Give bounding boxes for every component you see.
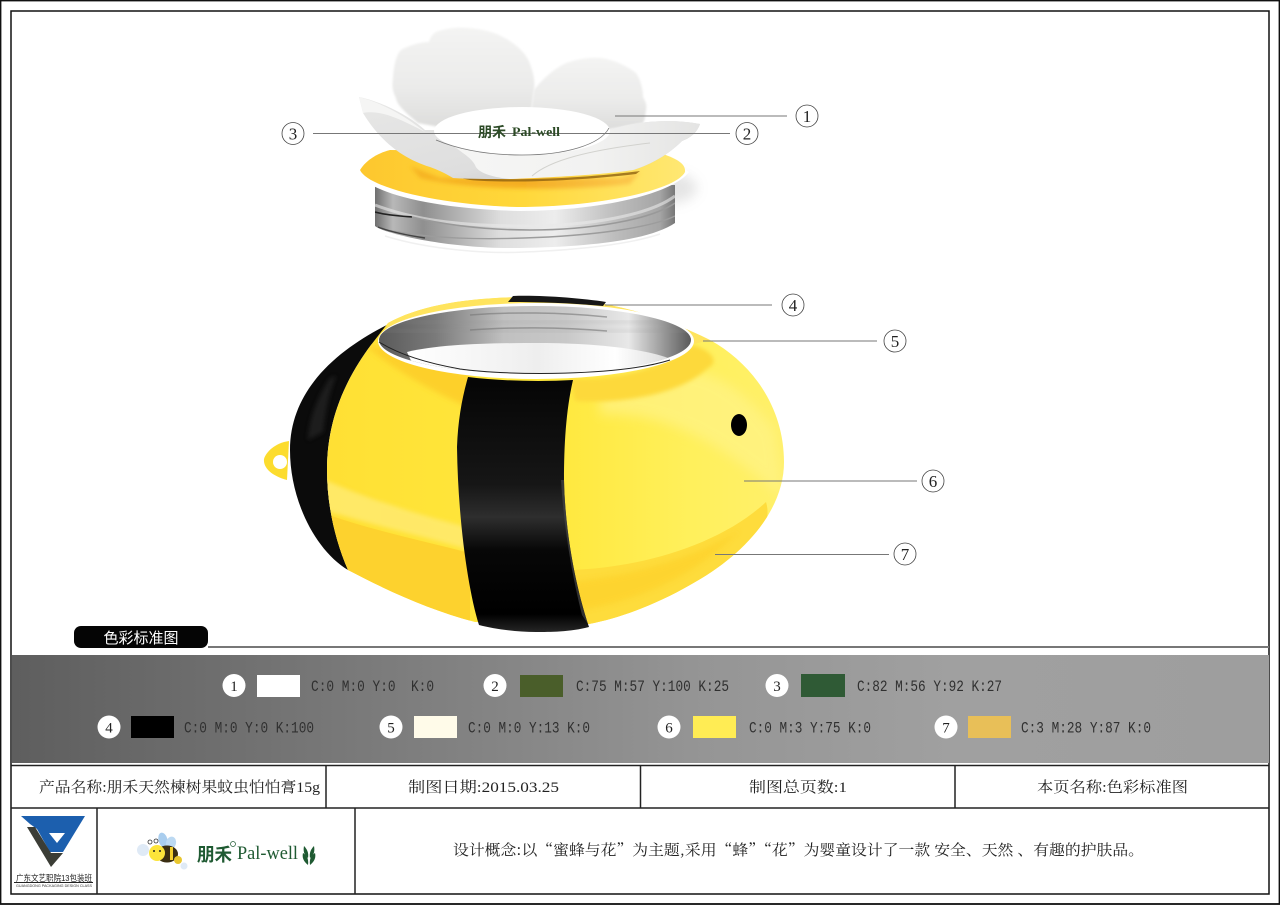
colour 1 bbox=[222, 674, 434, 697]
colour 6 bbox=[658, 716, 871, 738]
lid logo: 朋禾 bbox=[478, 124, 506, 140]
callout 1 bbox=[796, 105, 818, 127]
metal thread of lid bbox=[375, 185, 675, 252]
brand logo: Pal-well bbox=[237, 843, 298, 864]
callout 2: 2 bbox=[743, 124, 751, 144]
colour 2: 2 bbox=[491, 679, 499, 695]
inner white jar bbox=[407, 343, 668, 374]
colour 4: 4 bbox=[105, 720, 113, 736]
page name: 本页名称:色彩标准图 bbox=[1037, 779, 1188, 796]
design concept: 设计概念:以“蜜蜂与花”为主题,采用“蜂”“花”为婴童设计了一款 安全、天然 、有趣的护肤品。 bbox=[453, 839, 1144, 860]
body lower shade bbox=[332, 516, 470, 621]
black waist stripe bbox=[457, 377, 589, 632]
product: bee jar bbox=[264, 296, 785, 640]
school logo: GUANGDONG PACKAGING DESIGN CLASS bbox=[16, 883, 92, 888]
callout 7 bbox=[894, 543, 916, 565]
callout 3 bbox=[282, 122, 304, 144]
colour 7: C:3 M:28 Y:87 K:0 bbox=[1021, 720, 1151, 738]
callout 6 bbox=[922, 470, 944, 492]
panel: colour standards bbox=[12, 655, 1269, 763]
callout leaders bbox=[313, 116, 917, 554]
callout 1: 1 bbox=[803, 107, 811, 126]
product name: 产品名称:朋禾天然楝树果蚊虫怕怕膏15g bbox=[39, 778, 321, 796]
colour 3: C:82 M:56 Y:92 K:27 bbox=[857, 678, 1002, 696]
lid logo: Pal-well bbox=[512, 125, 561, 139]
total pages: 制图总页数:1 bbox=[749, 779, 847, 796]
top black mark bbox=[508, 296, 606, 306]
colour 7 bbox=[934, 716, 1151, 738]
colour 6: 6 bbox=[665, 720, 673, 736]
brand logo: 朋禾 bbox=[197, 845, 232, 865]
colour 3 bbox=[766, 674, 1002, 697]
eye bbox=[731, 414, 747, 436]
black rear cap bbox=[290, 322, 393, 570]
colour 3: 3 bbox=[773, 679, 781, 695]
opening rim bbox=[378, 303, 694, 379]
back petals bbox=[392, 28, 534, 135]
drawing date: 制图日期:2015.03.25 bbox=[408, 779, 559, 796]
school logo: 广东文艺职院13包装班 bbox=[16, 873, 92, 883]
callout 5 bbox=[884, 330, 906, 352]
colour 5: 5 bbox=[387, 720, 395, 736]
yellow lid disc bbox=[358, 166, 689, 211]
callout 4: 4 bbox=[789, 296, 798, 315]
colour 5 bbox=[380, 716, 590, 738]
shade around opening bbox=[365, 345, 470, 408]
hanging loop bbox=[264, 441, 289, 480]
callout 4 bbox=[782, 294, 804, 316]
colour 1: 1 bbox=[230, 679, 238, 695]
flower shadow on disc bbox=[410, 166, 640, 189]
yellow body bbox=[327, 297, 784, 624]
info table rules bbox=[11, 766, 1269, 894]
lid logo bbox=[478, 124, 561, 140]
colour 2 bbox=[484, 674, 729, 697]
section heading bbox=[74, 626, 208, 648]
colour 6: C:0 M:3 Y:75 K:0 bbox=[749, 720, 871, 738]
colour 1: C:0 M:0 Y:0 K:0 bbox=[311, 678, 434, 696]
icon: wheat bbox=[303, 846, 315, 865]
brand logo bbox=[137, 832, 315, 870]
colour 2: C:75 M:57 Y:100 K:25 bbox=[576, 678, 729, 696]
callout 6: 6 bbox=[929, 472, 937, 491]
colour 4: C:0 M:0 Y:0 K:100 bbox=[184, 720, 314, 738]
icon: bee bbox=[137, 832, 188, 870]
front petals bbox=[359, 97, 700, 179]
school logo bbox=[14, 816, 93, 888]
colour 5: C:0 M:0 Y:13 K:0 bbox=[468, 720, 590, 738]
flower centre with logo bbox=[434, 107, 610, 155]
callout 7: 7 bbox=[901, 545, 910, 564]
product: flower lid bbox=[358, 28, 700, 252]
colour 7: 7 bbox=[942, 720, 950, 736]
callout 2 bbox=[736, 122, 758, 144]
section heading: 色彩标准图 bbox=[103, 630, 179, 647]
callout 3: 3 bbox=[289, 124, 297, 144]
colour 4 bbox=[98, 716, 314, 738]
callout 5: 5 bbox=[891, 332, 899, 351]
upper highlight bbox=[600, 369, 785, 500]
